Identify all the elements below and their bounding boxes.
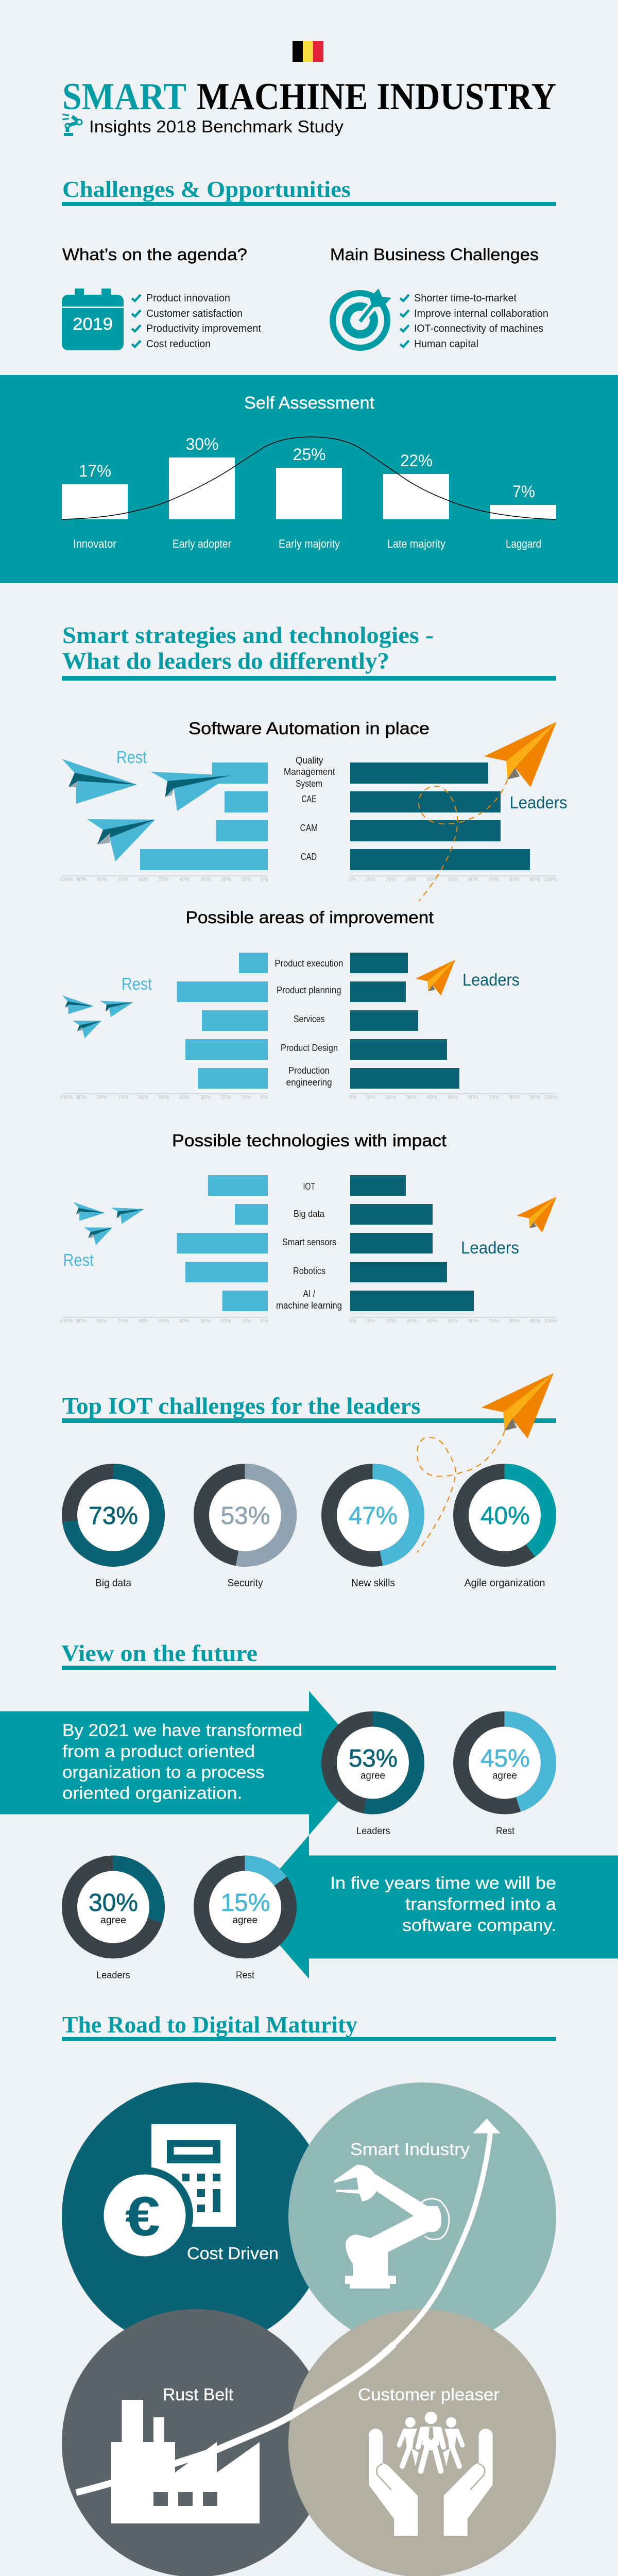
axis: percentage scale: 50% [159,1318,169,1324]
axis: percentage scale: 90% [529,877,540,883]
circle: rust belt [62,2309,330,2576]
donut: rest 15% agree [201,1863,289,1981]
row labels: Product Design [281,1043,338,1053]
donut: agile organization 40%: 40% [480,1502,529,1530]
row labels: Robotics [293,1266,325,1276]
list: challenges: Human capital [414,338,478,350]
donut: new skills 47%: 47% [349,1502,398,1530]
row labels: Quality [296,755,323,766]
panel: what's on the agenda [62,245,261,350]
chart: bell curve [62,437,556,519]
axis: percentage scale: 70% [489,877,499,883]
axis: percentage scale: 40% [179,1095,190,1100]
axis: percentage scale: 30% [406,877,417,883]
donut: rest 15% agree: 15% [220,1889,270,1917]
axis: percentage scale [60,875,557,883]
icon: small blue planes [73,1202,144,1245]
bar chart: adoption shares: Early majority [279,537,340,550]
axis: percentage scale: 30% [406,1095,417,1100]
axis: percentage scale: 40% [427,1318,437,1324]
axis: percentage scale: 80% [509,1318,520,1324]
bar chart: adoption shares: 7% [512,482,535,501]
axis: percentage scale: 90% [76,877,87,883]
axis: percentage scale: 100% [544,1095,557,1100]
axis: percentage scale: 30% [200,1318,211,1324]
heading: top IOT challenges: Top IOT challenges for the leaders [62,1393,421,1419]
axis: percentage scale: 50% [448,1318,458,1324]
bars: leaders [350,762,530,870]
heading: areas of improvement: Possible areas of improvement [185,908,434,927]
icon: small orange plane [416,960,455,995]
axis: percentage scale [60,1093,557,1100]
callout arrow: product to process: By 2021 we have transformed [62,1721,302,1740]
label: leaders: Leaders [461,1238,519,1257]
list: challenges: Shorter time-to-market [414,293,517,304]
row labels: System [296,778,322,789]
axis: percentage scale: 0% [349,877,356,883]
icon: calendar 2019: 2019 [73,314,113,333]
bar chart: adoption shares: Innovator [73,537,116,550]
axis: percentage scale: 100% [60,877,73,883]
heading: agenda: What’s on the agenda? [62,245,247,264]
axis: percentage scale: 60% [468,1095,478,1100]
icon: factory [111,2400,260,2523]
axis: percentage scale: 10% [241,1318,251,1324]
row labels: CAE [302,794,316,804]
axis: percentage scale: 70% [118,1095,128,1100]
axis: percentage scale: 100% [544,1318,557,1324]
axis: percentage scale: 90% [529,1318,540,1324]
donut: leaders 30% agree [70,1863,157,1981]
row labels: Big data [294,1209,325,1219]
axis: percentage scale: 50% [448,1095,458,1100]
donut: security 53%: Security [228,1578,263,1589]
list: agenda items: Customer satisfaction [146,308,243,319]
heading: view on the future [61,1640,556,1670]
axis: percentage scale: 0% [261,877,268,883]
label: leaders: Leaders [510,793,568,812]
circle: cost driven [62,2082,330,2350]
axis: percentage scale: 30% [200,1095,211,1100]
axis: percentage scale: 70% [118,1318,128,1324]
title [62,76,556,118]
icon: target with arrow [330,289,391,351]
axis: percentage scale: 60% [139,877,149,883]
icon: hands holding people [369,2412,493,2536]
list: agenda items: Cost reduction [146,338,211,350]
callout arrow: software company [247,1835,618,1979]
bar chart: adoption shares: 30% [185,435,218,453]
icon: small orange plane [517,1197,557,1232]
callout arrow: software company: In five years time we will be [330,1873,556,1892]
bars: rest [177,1175,268,1311]
axis: percentage scale: 100% [60,1095,73,1100]
axis: percentage scale: 50% [448,877,458,883]
callout arrow: product to process: organization to a process [62,1762,265,1782]
donut: leaders 53% agree: 53% [349,1745,398,1772]
bar chart: adoption shares: 25% [293,445,326,464]
row labels: Management [284,767,335,777]
axis: percentage scale: 40% [179,877,190,883]
axis: percentage scale: 60% [468,1318,478,1324]
axis: percentage scale: 90% [529,1095,540,1100]
axis: percentage scale: 100% [544,877,557,883]
row labels [276,1181,342,1311]
axis: percentage scale: 20% [386,877,396,883]
bars: rest [177,953,268,1089]
row labels: IOT [303,1181,315,1192]
bars: leaders [350,953,459,1089]
heading: smart strategies [62,622,556,681]
heading: road to digital maturity [62,2012,556,2041]
donut: new skills 47%: New skills [351,1578,395,1589]
icon: Belgian flag [293,41,323,62]
axis: percentage scale: 0% [349,1318,356,1324]
label: smart industry: Smart Industry [350,2140,470,2159]
bar chart: adoption shares: Early adopter [173,537,231,550]
title: SMART [62,76,186,118]
axis: percentage scale: 50% [159,877,169,883]
heading: smart strategies: Smart strategies and technologies - [62,622,434,648]
callout arrow: product to process: from a product oriented [62,1741,255,1760]
row labels [274,958,343,1088]
icon: blue paper planes [62,759,231,861]
donut: rest 15% agree: Rest [236,1970,255,1981]
row labels: CAD [301,852,317,862]
axis: percentage scale: 50% [159,1095,169,1100]
row labels: CAM [300,823,318,833]
list: challenges: Improve internal collaboration [414,308,548,319]
donut: leaders 53% agree: agree [360,1770,385,1782]
axis: percentage scale: 100% [60,1318,73,1324]
panel: areas of improvement chart [60,908,557,1100]
label: cost driven: Cost Driven [187,2244,279,2263]
bars: rest [140,762,268,870]
axis: percentage scale: 70% [489,1318,499,1324]
bar chart: adoption shares [62,435,556,550]
arrow: dashed flight path [417,1431,505,1552]
heading: top IOT challenges [62,1393,556,1423]
axis: percentage scale: 30% [200,877,211,883]
axis: percentage scale: 90% [76,1318,87,1324]
donut: leaders 53% agree [329,1719,417,1837]
axis: percentage scale: 80% [97,1318,107,1324]
circle: smart industry [288,2082,556,2350]
icon: calendar 2019 [62,289,124,350]
heading: view on the future: View on the future [61,1640,258,1666]
axis: percentage scale: 70% [489,1095,499,1100]
axis: percentage scale: 20% [220,877,231,883]
donut: rest 45% agree [461,1719,548,1837]
icon: robot arm [334,2165,449,2289]
axis: percentage scale: 60% [468,877,478,883]
row labels: machine learning [276,1300,342,1311]
donut: rest 45% agree: Rest [496,1826,515,1837]
heading: software automation: Software Automation in place [188,719,430,738]
axis: percentage scale: 10% [365,1318,375,1324]
label: rest: Rest [63,1250,94,1269]
row labels: Product execution [274,958,343,969]
axis: percentage scale: 80% [97,1095,107,1100]
axis: percentage scale: 0% [261,1318,268,1324]
label: rest: Rest [122,974,152,993]
axis: percentage scale: 60% [139,1095,149,1100]
donut: agile organization 40%: Agile organization [465,1578,545,1589]
panel: self assessment [0,375,618,583]
axis: percentage scale: 0% [261,1095,268,1100]
heading: self assessment: Self Assessment [244,393,374,412]
donut: new skills 47% [329,1471,417,1589]
donut: big data 73%: Big data [95,1578,132,1589]
axis: percentage scale: 20% [386,1095,396,1100]
heading: business challenges: Main Business Challenges [330,245,539,264]
row labels: engineering [286,1077,332,1088]
axis: percentage scale: 80% [509,1095,520,1100]
axis: percentage scale: 10% [365,877,375,883]
label: customer pleaser: Customer pleaser [358,2385,500,2404]
donut: security 53% [201,1471,289,1589]
bar chart: adoption shares: 17% [79,462,111,480]
axis: percentage scale: 0% [349,1095,356,1100]
heading: technologies with impact: Possible technologies with impact [172,1131,447,1150]
callout arrow: software company: software company. [402,1916,556,1935]
axis: percentage scale: 20% [220,1318,231,1324]
donut: leaders 30% agree: agree [100,1915,126,1926]
axis: percentage scale: 60% [139,1318,149,1324]
list: agenda items: Product innovation [146,293,230,304]
donut: rest 15% agree: agree [233,1915,258,1926]
row labels [284,755,335,862]
axis: percentage scale [60,1317,557,1324]
axis: percentage scale: 20% [386,1318,396,1324]
list: agenda items [132,293,261,350]
row labels: Production [288,1065,330,1076]
list: challenges [400,293,548,350]
donut: leaders 30% agree: Leaders [96,1970,130,1981]
axis: percentage scale: 10% [241,1095,251,1100]
heading: smart strategies: What do leaders do differently? [62,648,389,674]
icon: robot arm [62,114,82,136]
bars: leaders [350,1175,474,1311]
donut: big data 73% [70,1471,157,1589]
arrow: dashed flight path [419,779,507,901]
callout arrow: product to process [0,1691,372,1835]
label: leaders: Leaders [462,970,520,989]
axis: percentage scale: 80% [509,877,520,883]
icon: orange paper plane [484,722,557,787]
axis: percentage scale: 10% [365,1095,375,1100]
axis: percentage scale: 40% [427,1095,437,1100]
heading: challenges and opportunities: Challenges & Opportunities [62,177,351,202]
row labels: AI / [303,1289,315,1299]
panel: main business challenges [330,245,548,351]
axis: percentage scale: 40% [179,1318,190,1324]
label: rust belt: Rust Belt [163,2385,233,2404]
donut: leaders 53% agree: Leaders [356,1826,390,1837]
callout arrow: product to process: oriented organization. [62,1784,243,1803]
row labels: Smart sensors [282,1237,336,1247]
donut: big data 73%: 73% [89,1502,138,1530]
icon: calculator and euro coin [96,2124,236,2264]
axis: percentage scale: 30% [406,1318,417,1324]
bar chart: adoption shares: 22% [400,451,433,470]
subtitle: Insights 2018 Benchmark Study [89,117,344,136]
axis: percentage scale: 70% [118,877,128,883]
axis: percentage scale: 40% [427,877,437,883]
donut: agile organization 40% [461,1471,548,1589]
heading: road to digital maturity: The Road to Digital Maturity [62,2012,357,2038]
axis: percentage scale: 80% [97,877,107,883]
axis: percentage scale: 20% [220,1095,231,1100]
circle: customer pleaser [288,2309,556,2576]
axis: percentage scale: 90% [76,1095,87,1100]
donut: security 53%: 53% [220,1502,270,1530]
icon: orange paper plane [481,1373,554,1438]
axis: percentage scale: 10% [241,877,251,883]
icon: calculator and euro coin: € [125,2185,160,2247]
bar chart: adoption shares: Late majority [387,537,445,550]
donut: rest 45% agree: 45% [480,1745,529,1772]
donut: rest 45% agree: agree [492,1770,517,1782]
bar chart: adoption shares: Laggard [506,537,541,550]
callout arrow: software company: transformed into a [405,1894,557,1913]
panel: technologies with impact chart [60,1131,557,1324]
row labels: Product planning [277,985,341,995]
list: agenda items: Productivity improvement [146,323,261,334]
panel: software automation chart [60,719,568,901]
row labels: Services [294,1014,324,1024]
panel: maturity quadrant circles [62,2082,556,2576]
arrow: road to maturity curve [76,2119,501,2493]
list: challenges: IOT-connectivity of machines [414,323,543,334]
heading: challenges and opportunities [62,177,556,206]
icon: small blue planes [62,995,133,1039]
title: MACHINE INDUSTRY [197,76,556,118]
donut: leaders 30% agree: 30% [89,1889,138,1917]
label: rest: Rest [116,748,147,767]
